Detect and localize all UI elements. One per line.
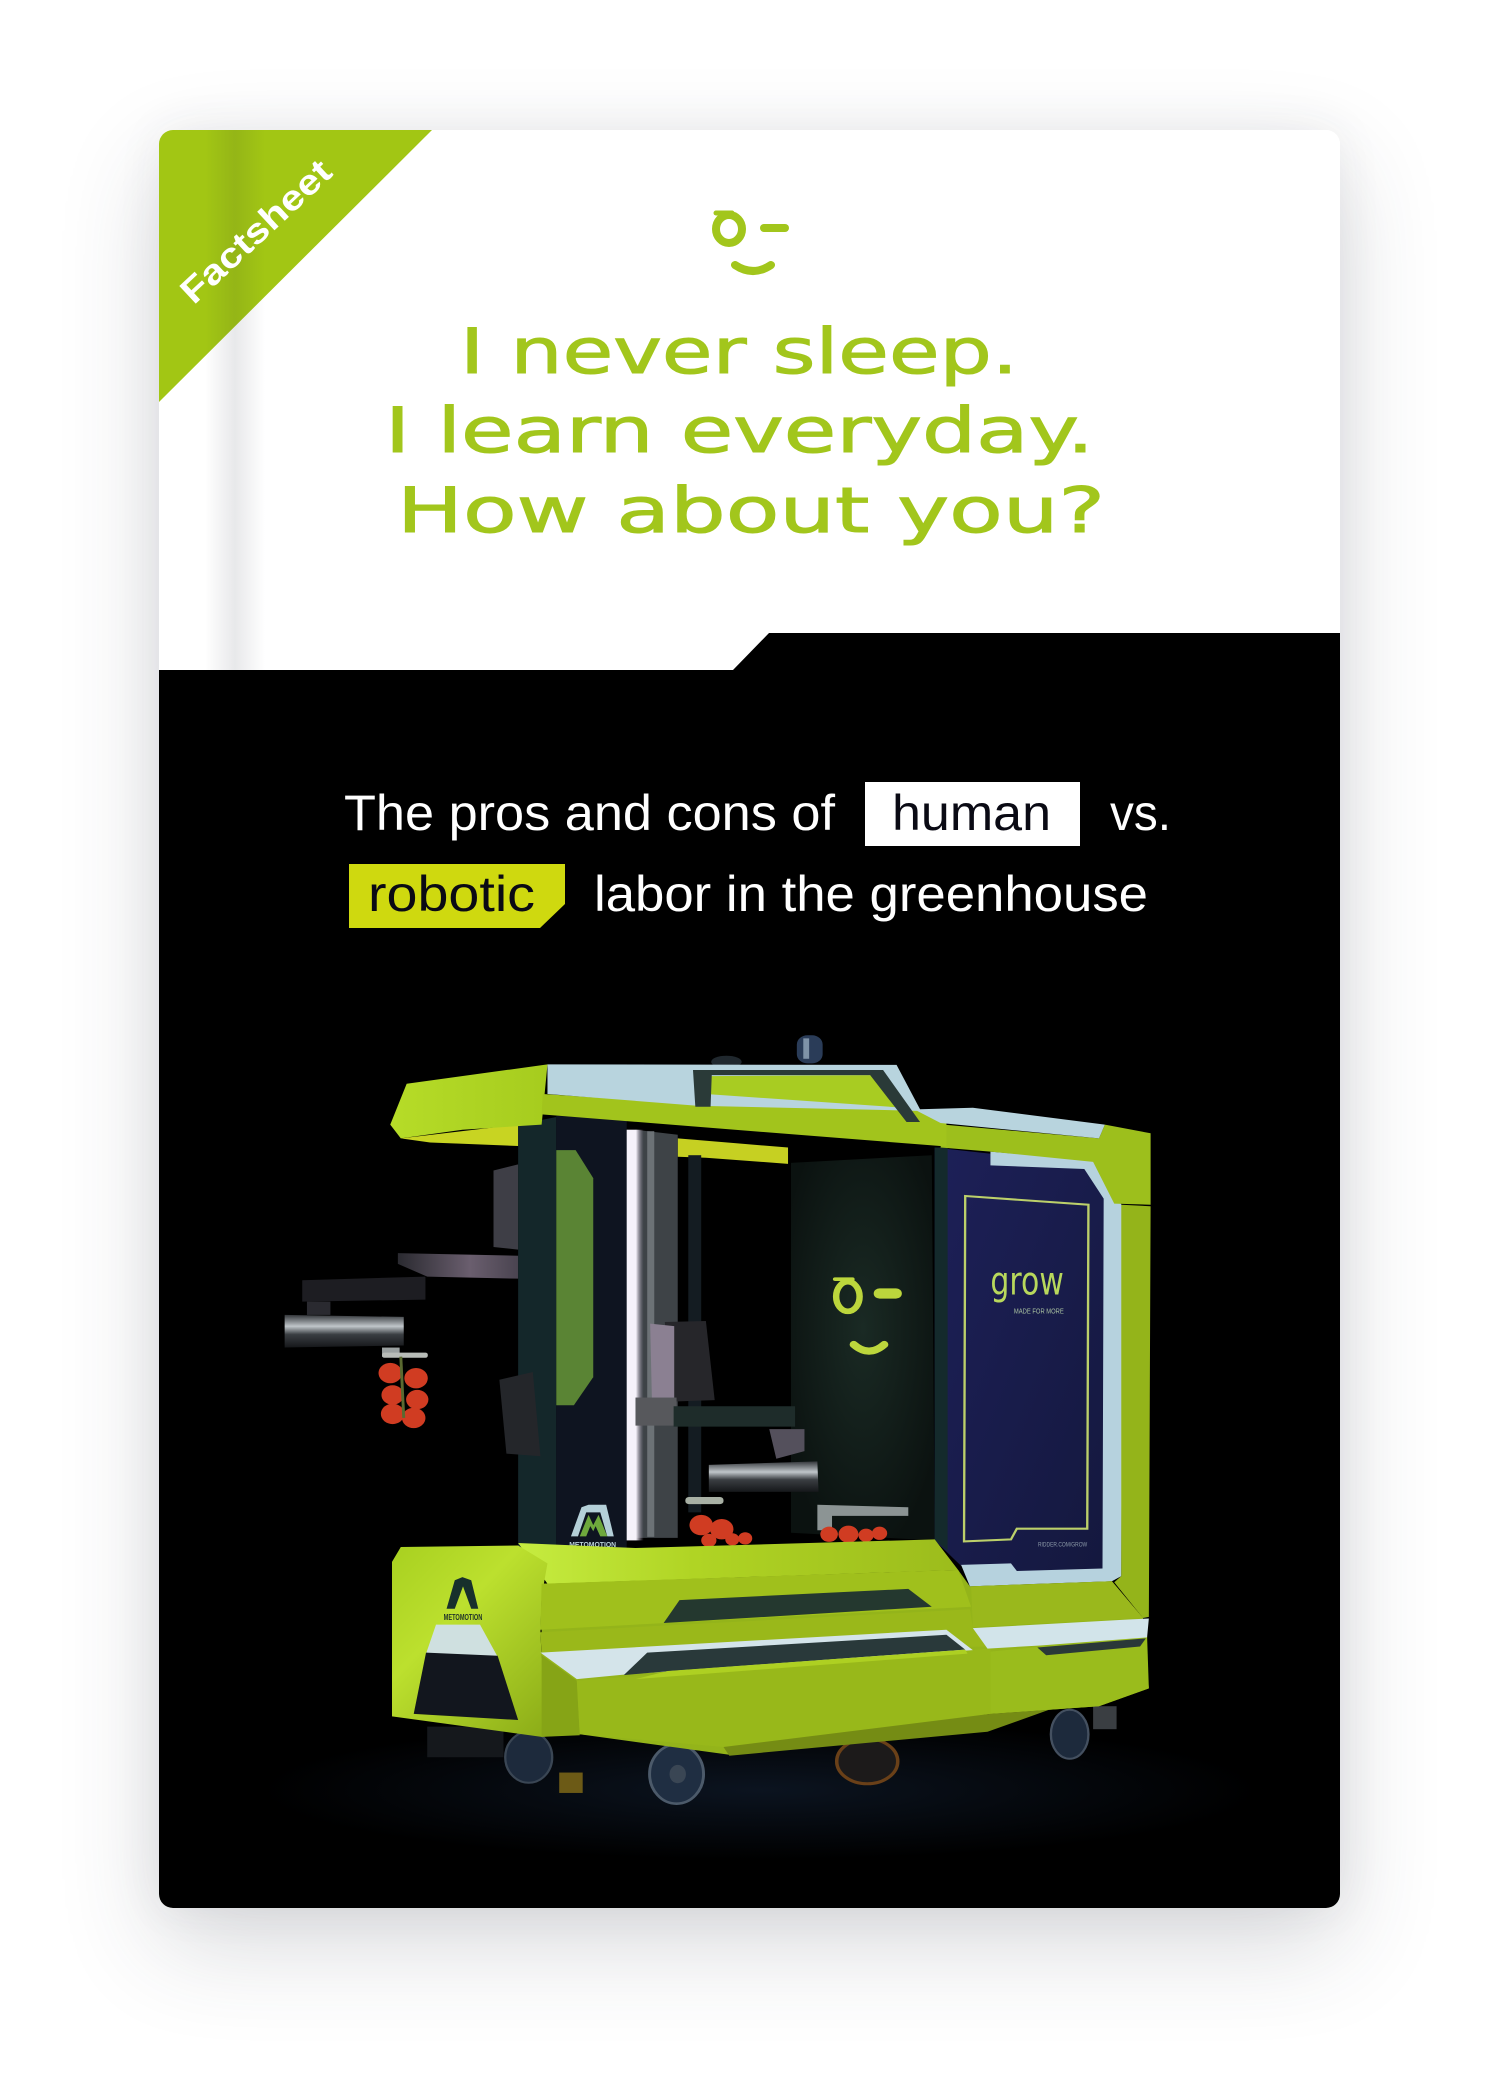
subheading: labor in the greenhouse [594, 866, 1148, 922]
subheading: human [892, 785, 1051, 841]
headline: I never sleep. [460, 315, 1018, 388]
panel: factsheet cover card [159, 130, 1340, 1908]
rails [635, 1130, 678, 1538]
ribbon label: Factsheet: Factsheet [173, 152, 340, 311]
right navy panel: grow [990, 1258, 1064, 1304]
highlight: robotic [349, 864, 565, 928]
roof [390, 1064, 1105, 1147]
headline [385, 315, 1105, 547]
ribbon: green corner triangle [159, 130, 432, 402]
base backing [542, 1570, 1149, 1755]
yellow ceiling [678, 1138, 788, 1164]
side screen [499, 1372, 540, 1456]
wheels [427, 1706, 1117, 1804]
right green frame [941, 1125, 1151, 1205]
tomatoes on left gripper [379, 1357, 428, 1428]
floor glow [388, 1741, 1132, 1842]
headline: How about you? [397, 474, 1105, 547]
subheading: robotic [368, 866, 535, 922]
back wall with face [791, 1155, 935, 1540]
central arm [635, 1321, 819, 1504]
LED strip [626, 1130, 644, 1540]
tray [817, 1505, 908, 1530]
illustration: greenhouse harvesting robot [285, 1035, 1151, 1804]
icon: winking face logo [716, 213, 785, 271]
highlight: human [865, 782, 1080, 846]
subheading: The pros and cons of [344, 785, 835, 841]
base mid body [540, 1570, 988, 1655]
subheading: vs. [1110, 785, 1171, 841]
left pillar [518, 1116, 627, 1562]
inner column [688, 1155, 701, 1512]
base lower front [540, 1630, 1049, 1756]
arm: extended left [285, 1253, 518, 1358]
base right [971, 1581, 1149, 1714]
subheading [344, 782, 1171, 928]
tomatoes on table [689, 1515, 887, 1547]
panel: black lower section [159, 633, 1340, 1908]
base left block with logo [392, 1546, 548, 1737]
headline: I learn everyday. [385, 394, 1094, 467]
rear arm box [494, 1164, 518, 1250]
table top [518, 1539, 958, 1584]
left pillar: METOMOTION [569, 1541, 616, 1549]
right navy panel: RIDDER.COM/GROW [1038, 1541, 1087, 1548]
base left block with logo: METOMOTION [444, 1613, 482, 1622]
beacon light [711, 1035, 823, 1068]
right navy panel: MADE FOR MORE [1014, 1307, 1064, 1315]
right navy panel [935, 1148, 1122, 1586]
card shadow [159, 130, 1340, 1908]
